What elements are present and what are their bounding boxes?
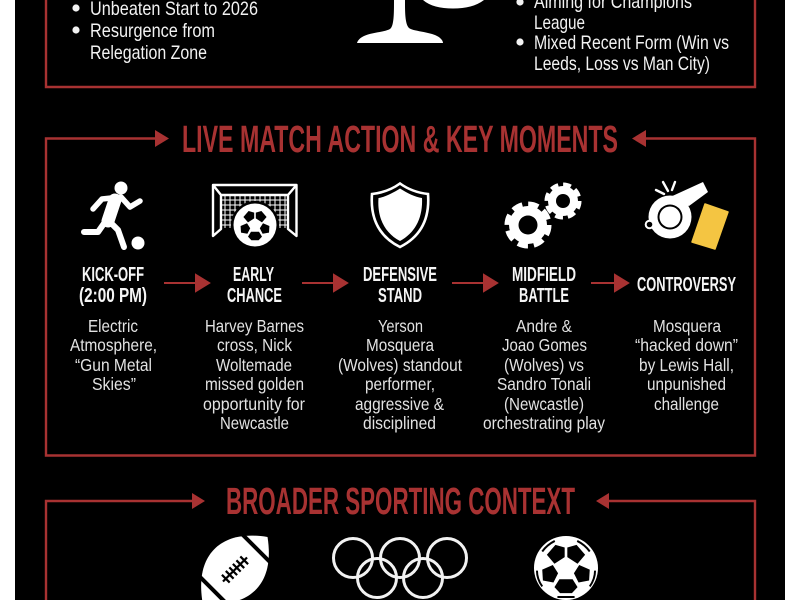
icon: gears	[507, 184, 580, 246]
text block: right team form: Leeds, Loss vs Man City)	[534, 53, 710, 75]
text: controversy description: unpunished	[647, 374, 726, 394]
icon: player kicking ball	[84, 182, 144, 250]
text: controversy description: challenge	[654, 394, 719, 414]
text: defensive stand description: Yerson	[378, 316, 423, 336]
icon: american football	[180, 514, 290, 600]
arrow: step 3 to 4	[452, 275, 497, 291]
panel: live match action	[46, 119, 755, 456]
icon: whistle and yellow card	[646, 182, 728, 249]
step: early chance	[203, 185, 305, 433]
text: defensive stand description: disciplined	[363, 413, 436, 433]
text block: right team form: Mixed Recent Form (Win vs	[534, 32, 729, 54]
icon: goal with ball	[213, 185, 296, 249]
text: kick-off description: Skies”	[92, 374, 136, 394]
text: early chance description: Newcastle	[220, 413, 289, 433]
text block: left team form: Relegation Zone	[90, 42, 207, 64]
text: controversy description: Mosquera	[653, 316, 721, 336]
label: defensive stand: STAND	[378, 284, 422, 307]
arrow: step 4 to 5	[591, 275, 628, 291]
text block: right team form	[516, 0, 729, 75]
text: defensive stand description: performer,	[365, 374, 435, 394]
arrow: step 2 to 3	[302, 275, 347, 291]
icon: soccer ball	[534, 536, 598, 600]
text: early chance description: Woltemade	[216, 355, 292, 375]
label: defensive stand: DEFENSIVE	[363, 263, 437, 286]
text: kick-off description: “Gun Metal	[75, 355, 152, 375]
text: early chance description	[203, 316, 305, 433]
panel: broader sporting context	[46, 481, 755, 600]
label: controversy: CONTROVERSY	[637, 273, 736, 296]
label: midfield battle: MIDFIELD	[512, 263, 576, 286]
label: defensive stand	[363, 263, 437, 307]
text: controversy description: by Lewis Hall,	[639, 355, 734, 375]
text: midfield battle description: Sandro Tonali	[497, 374, 591, 394]
text: kick-off description: Atmosphere,	[70, 335, 157, 355]
label: kick-off: (2:00 PM)	[79, 284, 147, 307]
label: kick-off	[79, 263, 147, 307]
text: defensive stand description: Mosquera	[366, 335, 434, 355]
panel: form comparison	[46, 0, 755, 87]
text: defensive stand description: aggressive &	[355, 394, 444, 414]
label: midfield battle: BATTLE	[519, 284, 569, 307]
text: defensive stand description	[338, 316, 462, 433]
icon: olympic rings	[334, 538, 466, 598]
text: controversy description	[635, 316, 738, 414]
label: early chance: CHANCE	[227, 284, 282, 307]
step: kick-off	[70, 182, 157, 394]
icon: trophy base	[357, 0, 484, 43]
icon: shield	[372, 184, 428, 247]
text block: left team form	[72, 0, 258, 64]
text: midfield battle description: (Wolves) vs	[504, 355, 584, 375]
label: early chance: EARLY	[233, 263, 274, 286]
text: early chance description: cross, Nick	[217, 335, 292, 355]
step: midfield battle	[483, 184, 605, 433]
label: early chance	[227, 263, 282, 307]
step: controversy	[635, 182, 738, 414]
text block: right team form: League	[534, 12, 585, 34]
text: kick-off description: Electric	[88, 316, 138, 336]
text: midfield battle description: orchestrating play	[483, 413, 605, 433]
text: midfield battle description: Joao Gomes	[502, 335, 587, 355]
label: kick-off: KICK-OFF	[82, 263, 144, 286]
text: midfield battle description: (Newcastle)	[504, 394, 584, 414]
text: controversy description: “hacked down”	[635, 335, 738, 355]
arrow: step 1 to 2	[164, 275, 209, 291]
label: midfield battle	[512, 263, 576, 307]
text: early chance description: missed golden	[205, 374, 304, 394]
text: midfield battle description	[483, 316, 605, 433]
text: defensive stand description: (Wolves) standout	[338, 355, 462, 375]
text: early chance description: Harvey Barnes	[205, 316, 304, 336]
text block: left team form: Resurgence from	[90, 20, 215, 42]
text: kick-off description	[70, 316, 157, 394]
step: defensive stand	[338, 184, 462, 433]
text: midfield battle description: Andre &	[516, 316, 572, 336]
text: early chance description: opportunity for	[203, 394, 305, 414]
